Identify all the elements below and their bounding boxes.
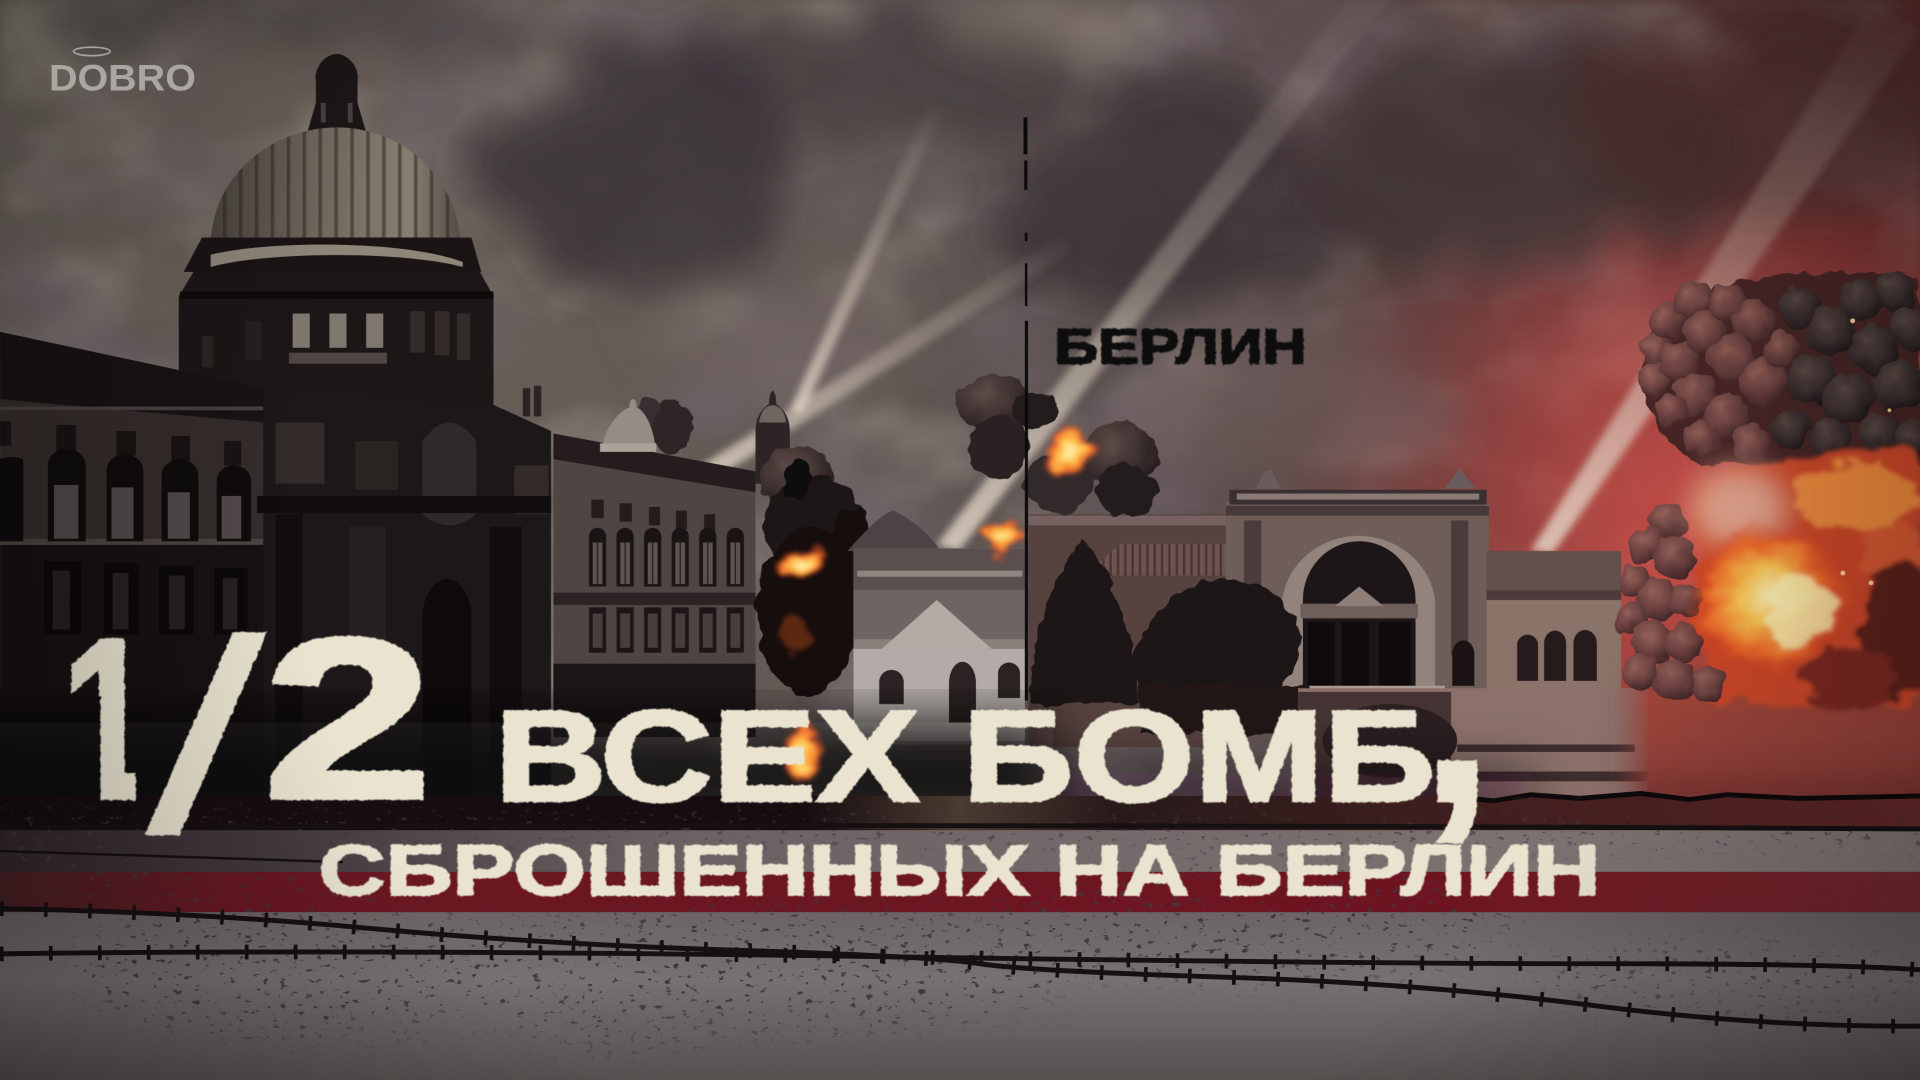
- headline line two: СБРОШЕННЫХ НА БЕРЛИН: [318, 832, 1600, 911]
- hall wall: [1029, 514, 1237, 747]
- palace right wing: [553, 391, 790, 737]
- lower right haze: [1635, 667, 1920, 808]
- bomb smoke over palace corner: [757, 446, 876, 696]
- big fraction: [70, 630, 425, 837]
- palace left wing: [0, 332, 263, 808]
- arched facade: [1226, 490, 1489, 692]
- concrete floor: [0, 912, 1920, 1080]
- headline line one: ,: [1420, 563, 1494, 857]
- upper arched window rows: [588, 525, 753, 587]
- dome base ring: [184, 238, 481, 272]
- right arcade: [1452, 551, 1621, 688]
- vertical divider line: [1024, 118, 1028, 700]
- fireball body: [1692, 450, 1920, 711]
- distant smoke behind palace: [638, 398, 692, 453]
- portal arch: [422, 579, 471, 808]
- wire strand one: [0, 909, 1920, 1026]
- corner tower: [756, 391, 790, 484]
- small windows row: [591, 500, 715, 533]
- dome lantern: [307, 54, 366, 132]
- drum: [179, 272, 493, 407]
- lower dark shading: [0, 722, 1531, 833]
- fire behind headline: [781, 718, 823, 781]
- wire strand two: [0, 952, 1920, 970]
- headline line one: ВСЕХ БОМБ: [495, 684, 1435, 829]
- searchlight beams: [698, 0, 1920, 553]
- big fraction: 2: [262, 590, 433, 847]
- barbed wire: [0, 826, 1920, 1026]
- rooftop statues: [1256, 468, 1476, 489]
- trees: [1030, 539, 1310, 735]
- headline line one: [495, 563, 1494, 857]
- palace dome: [179, 54, 493, 407]
- mushroom cap: [1637, 271, 1920, 465]
- dark torn band: [0, 793, 1920, 833]
- lower window rows: [588, 607, 753, 656]
- mushroom cloud explosion: [1615, 271, 1920, 711]
- ground panel: [0, 793, 1920, 1080]
- storm clouds: [61, 0, 1920, 478]
- fireball core: [1689, 522, 1850, 673]
- wire strand top: [0, 826, 1920, 829]
- logo: DOBRO: DOBRO: [49, 58, 196, 99]
- grey band: [0, 830, 1920, 882]
- hall roof: [1084, 544, 1232, 576]
- chimneys: [523, 386, 541, 416]
- embers: [1840, 318, 1891, 585]
- smoke and fire behind station: [958, 375, 1158, 553]
- quay and bridge: [1298, 688, 1647, 798]
- dark column: [1615, 502, 1725, 703]
- torn edge: [1445, 793, 1920, 801]
- city label: БЕРЛИН: [1054, 321, 1307, 375]
- upper windows: [0, 421, 241, 465]
- big fraction: /: [144, 582, 268, 892]
- red band: [0, 872, 1920, 912]
- arched windows: [0, 449, 251, 541]
- big fraction: 1: [61, 590, 154, 847]
- scratch texture: [0, 802, 1920, 1060]
- right station hall: [1029, 468, 1647, 798]
- lower windows: [44, 561, 247, 634]
- cupola: [602, 399, 655, 452]
- palace central portal: [257, 386, 551, 808]
- domed exhibition building: [847, 511, 1025, 744]
- dome shell: [211, 127, 460, 242]
- drum windows: [202, 311, 470, 367]
- pale smoke: [1690, 467, 1788, 550]
